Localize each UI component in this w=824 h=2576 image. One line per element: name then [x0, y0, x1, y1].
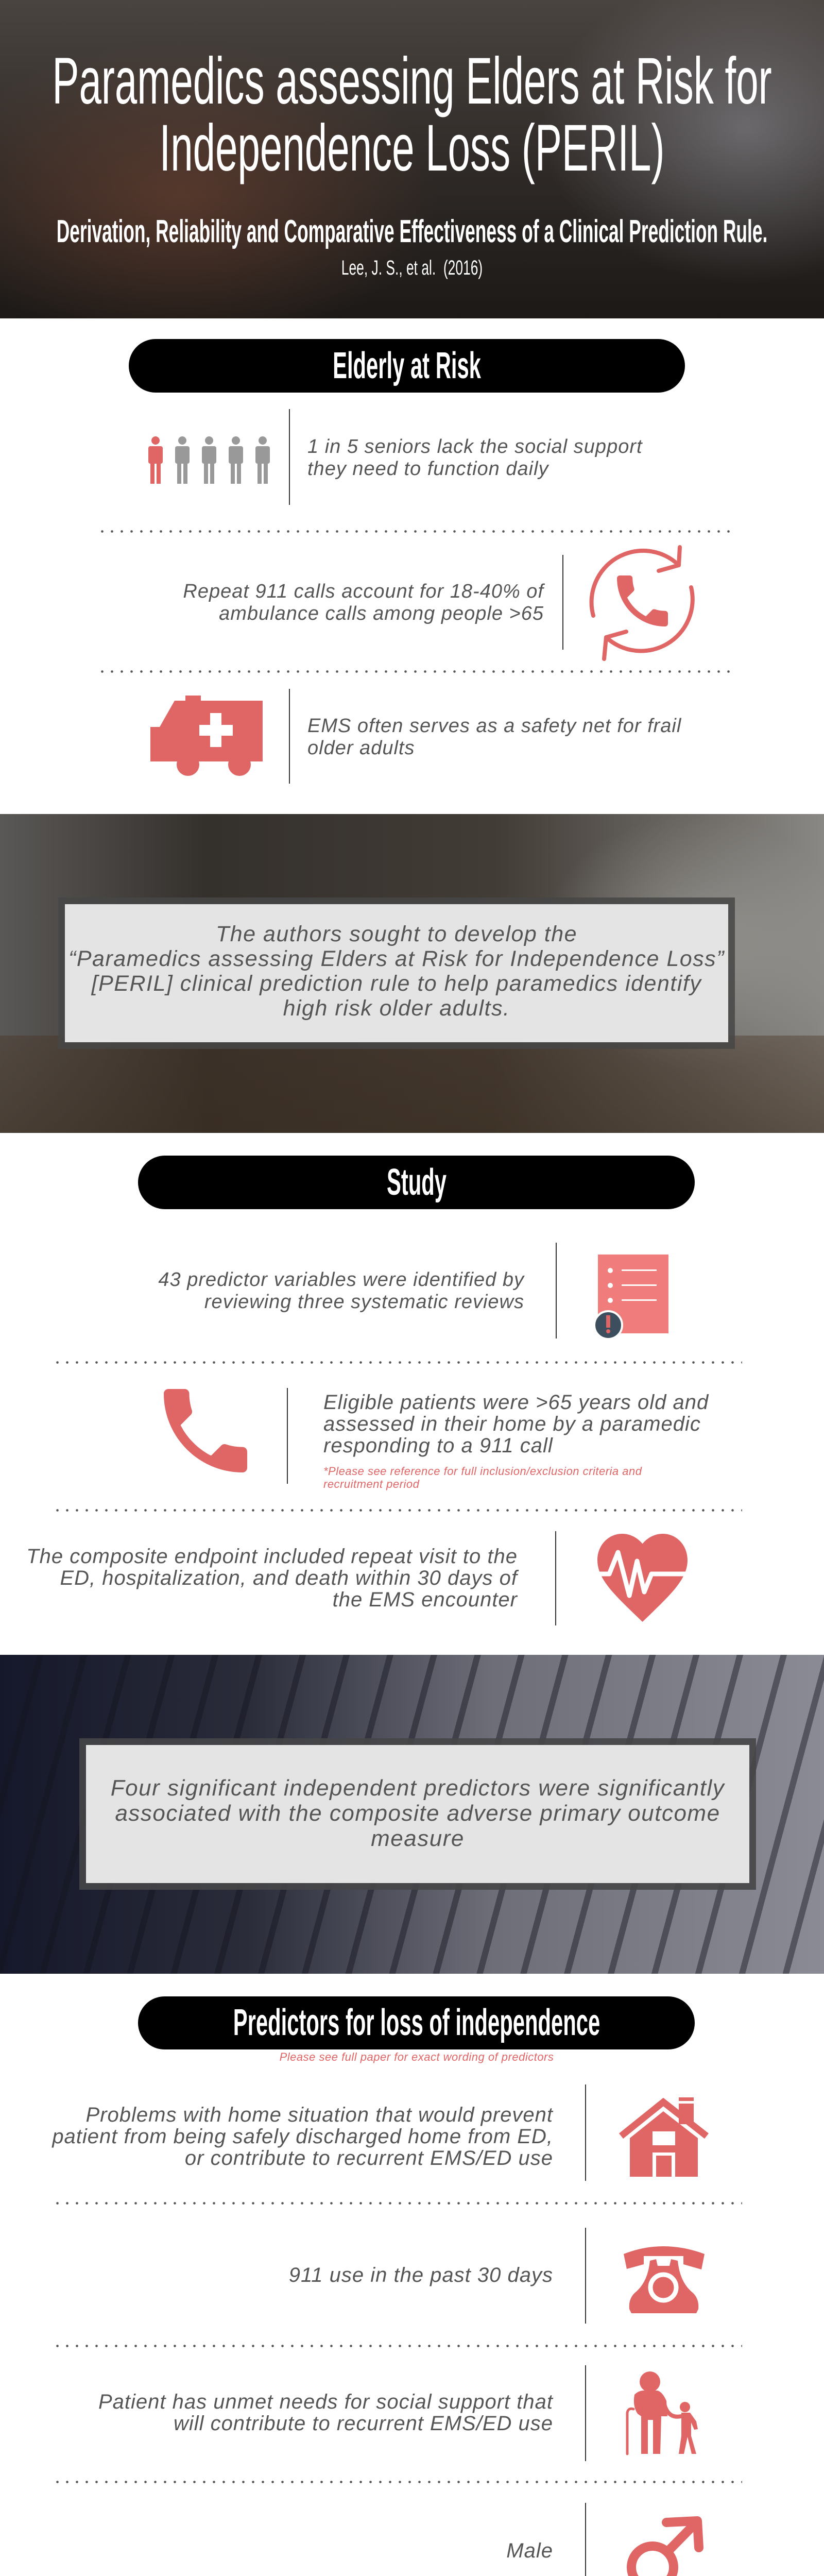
text: EMS safety net: EMS often serves as a safety net for frail	[307, 715, 681, 737]
heading: Study	[138, 1156, 695, 1209]
text: 1 in 5 seniors	[307, 436, 643, 480]
note: exact wording: Please see full paper for exact wording of predictors	[280, 2050, 554, 2063]
callout box: study aim: [PERIL] clinical prediction rule to help paramedics identify	[92, 971, 701, 996]
header banner	[0, 0, 824, 318]
title: Independence Loss (PERIL)	[160, 111, 664, 185]
callout box: predictors summary	[79, 1738, 756, 1890]
text: composite endpoint: The composite endpoint included repeat visit to the	[26, 1545, 518, 1568]
text: male: Male	[506, 2539, 553, 2562]
icon: ambulance	[150, 696, 263, 776]
text: repeat 911 calls: Repeat 911 calls account for 18-40% of	[183, 581, 544, 602]
heading: Predictors for loss of independence	[138, 1996, 695, 2049]
icon: five people	[148, 436, 270, 484]
text: 1 in 5 seniors: they need to function daily	[307, 458, 549, 480]
text: 1 in 5 seniors: 1 in 5 seniors lack the social support	[307, 436, 643, 457]
icon: old telephone	[624, 2246, 705, 2313]
note: inclusion criteria	[323, 1465, 642, 1490]
text: unmet social needs	[98, 2391, 553, 2435]
icon: phone handset	[164, 1389, 247, 1472]
callout box: predictors summary: associated with the composite adverse primary outcome	[115, 1801, 720, 1826]
callout box: study aim: “Paramedics assessing Elders at Risk for Independence Loss”	[68, 946, 725, 971]
icon: male symbol	[627, 2516, 703, 2576]
note: inclusion criteria: recruitment period	[323, 1478, 419, 1490]
text: eligible patients: Eligible patients were >65 years old and	[323, 1391, 709, 1414]
heading: Predictors for loss of independence: Predictors for loss of independence	[233, 2002, 600, 2043]
callout box: study aim	[58, 897, 735, 1049]
title	[52, 44, 772, 185]
icon: phone with cycle arrows	[589, 545, 695, 661]
subtitle: Derivation, Reliability and Comparative Effectiveness of a Clinical Prediction Rule.	[57, 214, 767, 249]
photo panel: authors aim	[0, 814, 824, 1133]
text: unmet social needs: Patient has unmet needs for social support that	[98, 2391, 553, 2413]
callout box: study aim: The authors sought to develop the	[216, 922, 577, 946]
title: Paramedics assessing Elders at Risk for	[52, 44, 772, 118]
text: eligible patients	[323, 1391, 709, 1457]
text: home situation	[52, 2104, 553, 2170]
note: inclusion criteria: *Please see reference for full inclusion/exclusion criteria and	[323, 1465, 642, 1478]
callout box: predictors summary: Four significant independent predictors were significantly	[111, 1775, 725, 1801]
heading: Study: Study	[386, 1162, 447, 1203]
text: EMS safety net: older adults	[307, 737, 415, 759]
author line: Lee, J. S., et al. (2016)	[341, 257, 483, 279]
callout box: study aim: high risk older adults.	[283, 996, 510, 1021]
icon: house	[619, 2097, 709, 2177]
text: composite endpoint	[26, 1545, 519, 1611]
icon: heart with pulse	[597, 1534, 688, 1622]
text: 43 predictor variables: reviewing three systematic reviews	[204, 1291, 524, 1313]
text: eligible patients: assessed in their home by a paramedic	[323, 1413, 701, 1435]
text: 43 predictor variables	[158, 1269, 525, 1313]
text: home situation: Problems with home situation that would prevent	[86, 2104, 553, 2126]
text: EMS safety net	[307, 715, 682, 759]
text: eligible patients: responding to a 911 call	[323, 1434, 553, 1457]
photo panel: four predictors	[0, 1655, 824, 1974]
callout box: predictors summary: measure	[371, 1826, 465, 1851]
icon: elder with child	[626, 2371, 698, 2455]
text: home situation: or contribute to recurrent EMS/ED use	[185, 2147, 553, 2170]
text: repeat 911 calls: ambulance calls among people >65	[219, 603, 544, 624]
text: 43 predictor variables: 43 predictor variables were identified by	[158, 1269, 524, 1291]
text: unmet social needs: will contribute to recurrent EMS/ED use	[174, 2412, 553, 2435]
text: composite endpoint: ED, hospitalization, and death within 30 days of	[60, 1567, 518, 1589]
text: composite endpoint: the EMS encounter	[333, 1588, 518, 1611]
heading: Elderly at Risk	[129, 339, 685, 393]
icon: document with alert	[595, 1255, 668, 1338]
text: home situation: patient from being safely discharged home from ED,	[52, 2125, 553, 2148]
text: 911 use: 911 use in the past 30 days	[289, 2264, 553, 2286]
text: repeat 911 calls	[183, 581, 545, 624]
heading: Elderly at Risk: Elderly at Risk	[333, 345, 481, 386]
